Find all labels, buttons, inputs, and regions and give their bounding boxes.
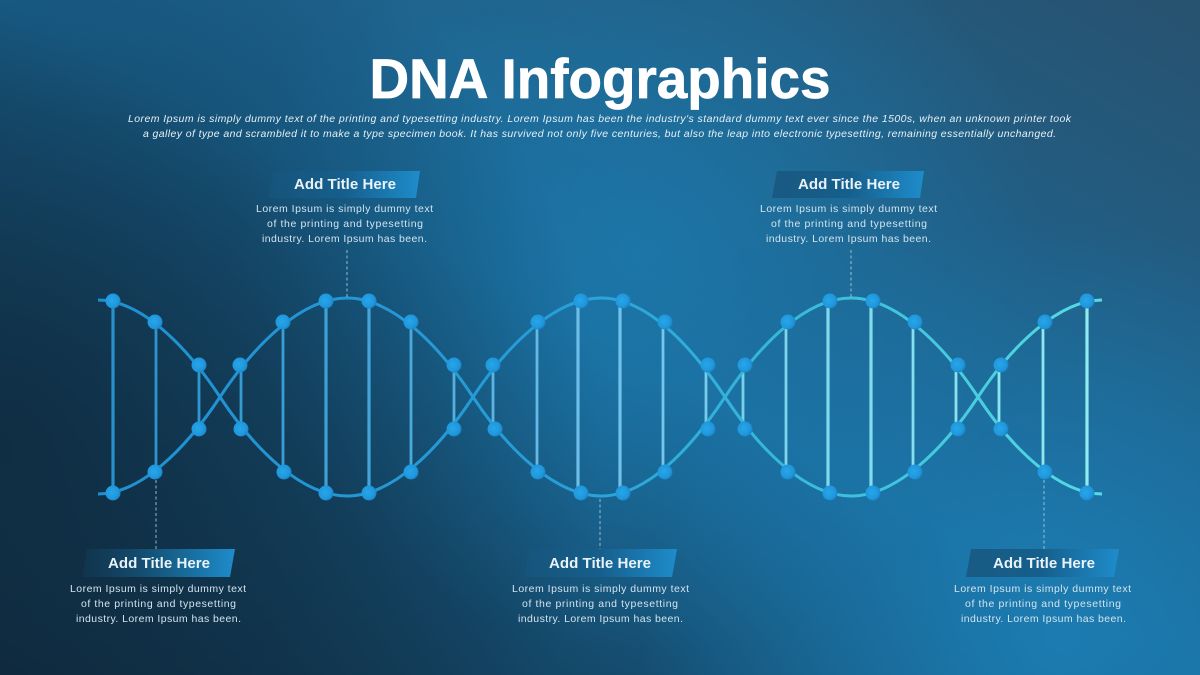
intro text <box>128 113 1072 140</box>
DNA helix <box>98 294 1102 500</box>
title tag <box>524 549 677 577</box>
title tag <box>82 549 235 577</box>
callout text: industry. Lorem Ipsum has been. <box>76 613 241 625</box>
callout text: Lorem Ipsum is simply dummy text <box>70 583 246 595</box>
callout: bottom center <box>512 499 689 625</box>
callout text <box>760 203 937 245</box>
callout: top left <box>256 171 433 298</box>
title tag <box>268 171 420 198</box>
callout text <box>256 203 433 245</box>
callout title: Add Title Here <box>294 177 396 193</box>
intro text: a galley of type and scrambled it to make a type specimen book. It has survived not only five centuries, but also the leap into electronic typesetting, remaining essentially unchanged. <box>143 128 1056 140</box>
strand two <box>98 298 1102 496</box>
callout text: of the printing and typesetting <box>771 218 927 230</box>
nodes <box>106 294 1094 500</box>
callout text: Lorem Ipsum is simply dummy text <box>760 203 937 215</box>
rungs <box>113 301 1087 493</box>
callout text: industry. Lorem Ipsum has been. <box>766 233 931 245</box>
callout text: of the printing and typesetting <box>965 598 1121 610</box>
callout text <box>512 583 689 625</box>
callout title: Add Title Here <box>798 177 900 193</box>
callout text: of the printing and typesetting <box>267 218 423 230</box>
callout title: Add Title Here <box>993 556 1095 572</box>
callout text: of the printing and typesetting <box>522 598 678 610</box>
callout text: industry. Lorem Ipsum has been. <box>961 613 1126 625</box>
callout text: of the printing and typesetting <box>81 598 236 610</box>
callout text: Lorem Ipsum is simply dummy text <box>256 203 433 215</box>
callout title: Add Title Here <box>108 556 210 572</box>
callout: bottom right <box>954 480 1131 625</box>
callout title: Add Title Here <box>549 556 651 572</box>
callout text: industry. Lorem Ipsum has been. <box>262 233 427 245</box>
title tag <box>966 549 1119 577</box>
callout text <box>70 583 246 625</box>
callout: bottom left <box>70 480 246 625</box>
strand one <box>98 298 1102 496</box>
title: DNA Infographics <box>370 47 830 110</box>
callout text: Lorem Ipsum is simply dummy text <box>954 583 1131 595</box>
intro text: Lorem Ipsum is simply dummy text of the printing and typesetting industry. Lorem Ipsum has been the industry's standard dummy text ever since the 1500s, when an unknown printer took <box>128 113 1072 125</box>
callout: top right <box>760 171 937 298</box>
callout text: Lorem Ipsum is simply dummy text <box>512 583 689 595</box>
callout text <box>954 583 1131 625</box>
callout text: industry. Lorem Ipsum has been. <box>518 613 683 625</box>
title tag <box>772 171 924 198</box>
